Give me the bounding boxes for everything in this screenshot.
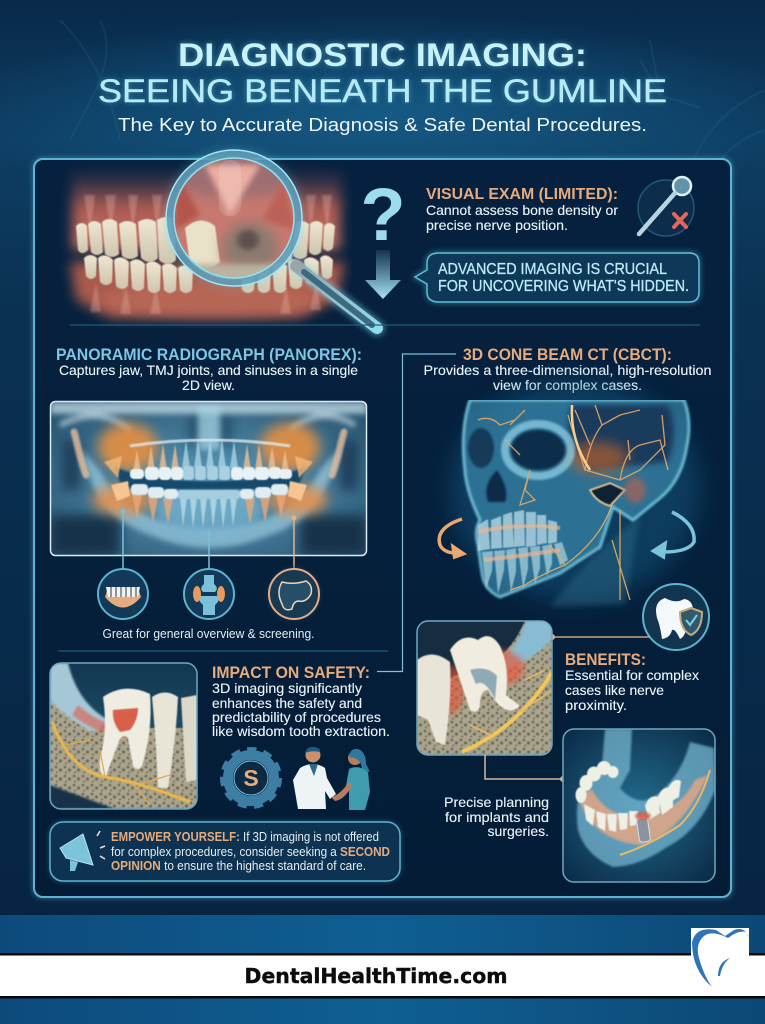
magnifying glass <box>164 146 377 328</box>
panorex heading and text: Captures jaw, TMJ joints, and sinuses in a single <box>59 362 358 378</box>
title: SEEING BENEATH THE GUMLINE <box>98 73 667 109</box>
teeth photo <box>70 170 345 318</box>
cranium and face <box>463 400 689 597</box>
implants text <box>444 794 549 839</box>
icon: gear with S: S <box>243 765 259 791</box>
visual exam text: Cannot assess bone density or <box>426 202 618 218</box>
benefits text: BENEFITS: <box>565 650 646 669</box>
dark corners and sinuses <box>50 415 367 556</box>
upper roots <box>104 444 313 478</box>
callout text <box>111 830 390 873</box>
implants text: surgeries. <box>488 823 549 839</box>
tooth orange band <box>478 526 560 532</box>
impact on safety text <box>212 663 390 739</box>
arrow: rotate left <box>439 519 465 558</box>
panorex caption: Great for general overview & screening. <box>102 627 314 641</box>
impact on safety text: IMPACT ON SAFETY: <box>212 663 370 682</box>
callout: advanced imaging <box>415 253 699 302</box>
lower teeth <box>111 481 307 501</box>
patient <box>331 749 370 810</box>
mandible <box>82 450 338 548</box>
CBCT heading and text: Provides a three-dimensional, high-resolution <box>424 362 712 378</box>
benefits text: cases like nerve <box>565 682 664 698</box>
callout: empower yourself <box>50 822 400 881</box>
CBCT heading and text: view for complex cases. <box>493 377 642 393</box>
cheek and sinus <box>590 483 625 506</box>
visual exam text <box>426 186 618 233</box>
eye sockets <box>468 424 571 476</box>
skull CBCT <box>450 380 700 606</box>
callout text: EMPOWER YOURSELF: If 3D imaging is not offered <box>111 830 379 844</box>
icon: megaphone <box>60 831 105 871</box>
connector: benefits <box>549 634 650 640</box>
impact on safety text: enhances the safety and <box>212 695 362 711</box>
implants text: Precise planning <box>444 794 549 810</box>
CBCT heading and text: 3D CONE BEAM CT (CBCT): <box>463 345 672 364</box>
upper teeth row <box>76 217 335 264</box>
temporal dark area <box>569 405 674 470</box>
benefits text: proximity. <box>565 697 627 713</box>
jaw implant image <box>563 729 715 882</box>
icon: teeth <box>98 569 148 619</box>
impact on safety text: predictability of procedures <box>212 709 381 725</box>
lens <box>164 146 304 288</box>
benefits text: Essential for complex <box>565 667 699 683</box>
impact on safety text: like wisdom tooth extraction. <box>212 723 390 739</box>
lower roots <box>132 494 286 524</box>
icon: gear with S <box>223 750 279 806</box>
callout: advanced imaging: FOR UNCOVERING WHAT'S HIDDEN. <box>438 278 689 295</box>
tooth image: benefits <box>417 621 552 755</box>
bottom banner band <box>0 915 765 1024</box>
condyles <box>74 432 344 475</box>
logo: tooth <box>691 928 749 987</box>
benefits text <box>565 650 699 713</box>
title <box>98 37 667 109</box>
gum ridges <box>84 195 332 314</box>
handle <box>296 266 377 328</box>
visual exam text: precise nerve position. <box>426 217 568 233</box>
CBCT heading and text <box>424 345 712 393</box>
nerves <box>478 405 668 600</box>
connector: safety to CBCT <box>377 354 456 672</box>
callout: advanced imaging: ADVANCED IMAGING IS CRUCIAL <box>438 261 667 278</box>
icon: TMJ joint <box>184 569 234 619</box>
arrow: rotate right <box>652 512 694 558</box>
title: SEEING BENEATH THE GUMLINE <box>98 73 667 109</box>
subtitle: The Key to Accurate Diagnosis & Safe Dental Procedures. <box>118 115 647 135</box>
panorex heading and text: 2D view. <box>182 377 235 393</box>
callout text: for complex procedures, consider seeking a SECOND <box>111 845 390 859</box>
connector: implants <box>485 755 566 782</box>
visual exam text: VISUAL EXAM (LIMITED): <box>426 186 618 203</box>
implants text: for implants and <box>445 809 549 825</box>
palate arc <box>130 440 290 446</box>
neck and spine <box>550 515 640 606</box>
tooth image: wisdom tooth <box>50 663 197 809</box>
panorex heading and text <box>56 345 362 393</box>
impact on safety text: 3D imaging significantly <box>212 680 362 696</box>
top whitish strands <box>50 402 367 450</box>
nerve <box>620 770 710 855</box>
teeth <box>576 761 681 832</box>
lower teeth row <box>84 255 333 293</box>
icon: sinus <box>268 568 320 620</box>
arrow: down <box>365 250 401 299</box>
implant <box>636 817 651 843</box>
footer white bar <box>0 953 765 998</box>
lower teeth <box>482 542 568 594</box>
icon: question mark: ? <box>360 173 406 256</box>
callout lines and dots <box>120 508 296 568</box>
panorex heading and text: PANORAMIC RADIOGRAPH (PANOREX): <box>56 345 362 364</box>
jaw bone <box>577 729 715 867</box>
gum and roots <box>578 775 708 845</box>
panoramic x-ray <box>50 401 367 556</box>
title: DIAGNOSTIC IMAGING: <box>178 37 587 73</box>
upper teeth <box>478 510 557 551</box>
icon: doctor and patient handshake <box>293 747 370 810</box>
doctor <box>293 747 336 809</box>
main panel <box>33 158 732 898</box>
mouth gap <box>114 466 306 490</box>
icon: tooth with shield <box>643 584 709 650</box>
orange glow <box>92 423 328 515</box>
upper teeth <box>130 466 292 480</box>
footer white bar: DentalHealthTime.com <box>244 964 508 988</box>
title: DIAGNOSTIC IMAGING: <box>178 37 587 73</box>
icon: magnifier with x <box>638 177 694 236</box>
callout text: OPINION to ensure the highest standard of care. <box>111 859 366 873</box>
upper and lower gums <box>70 170 345 318</box>
nasal cavity <box>486 470 506 502</box>
